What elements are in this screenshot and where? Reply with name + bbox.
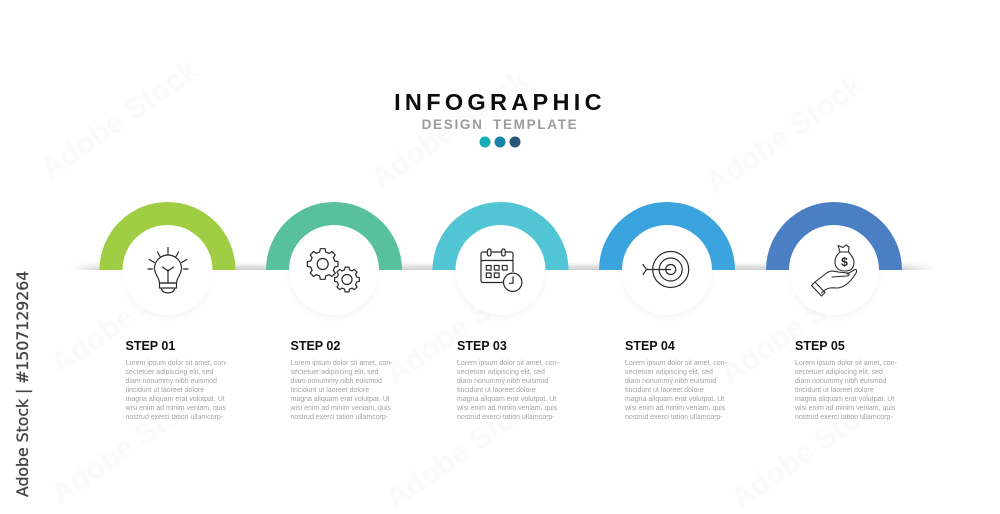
title dots [480, 136, 520, 148]
icon: hand with money bag [812, 245, 857, 296]
step 3 text: sectetuer adipiscing elit, sed [457, 369, 545, 376]
arc 5 [766, 202, 902, 317]
arc 4 [599, 202, 735, 317]
step 2 text: STEP 02 [290, 339, 340, 353]
step 5 text: STEP 05 [795, 339, 845, 353]
step 4 text: nostrud exerci tation ullamcorp- [625, 414, 723, 421]
step 5 text: tincidunt ut laoreet dolore [795, 387, 874, 394]
background and diagram: Adobe Stock [35, 53, 204, 186]
step 2 text: nostrud exerci tation ullamcorp- [290, 414, 388, 421]
background and diagram: Adobe Stock [380, 383, 549, 514]
step 5 text: diam nonummy nibh euismod [795, 378, 886, 385]
step 5 text: nostrud exerci tation ullamcorp- [795, 414, 893, 421]
background and diagram: Adobe Stock [725, 383, 894, 514]
icon: calendar with clock [481, 249, 522, 291]
step 1 text: sectetuer adipiscing elit, sed [126, 369, 213, 376]
step 3 text: tincidunt ut laoreet dolore [457, 387, 536, 394]
step 5 text: Lorem ipsum dolor sit amet, con- [795, 360, 897, 367]
background and diagram: Adobe Stock [45, 378, 214, 511]
step 5 text: sectetuer adipiscing elit, sed [795, 369, 883, 376]
step 4 text [625, 339, 727, 421]
step 2 text: magna aliquam erat volutpat. Ut [290, 396, 390, 403]
step 5 text: wisi enim ad minim veniam, quis [795, 405, 895, 412]
step 2 text [290, 339, 392, 421]
background and diagram: Adobe Stock [45, 248, 214, 381]
step 1 text: tincidunt ut laoreet dolore [126, 387, 204, 394]
step 4 text: tincidunt ut laoreet dolore [625, 387, 704, 394]
step 1 text: Lorem ipsum dolor sit amet, con- [126, 360, 227, 367]
step 4 text: sectetuer adipiscing elit, sed [625, 369, 713, 376]
step 2 text: Lorem ipsum dolor sit amet, con- [290, 360, 392, 367]
background and diagram: Adobe Stock [715, 258, 884, 391]
step 1 text: STEP 01 [126, 339, 175, 353]
step 3 text: diam nonummy nibh euismod [457, 378, 548, 385]
step 2 text: sectetuer adipiscing elit, sed [290, 369, 378, 376]
title: INFOGRAPHIC [394, 89, 606, 115]
subtitle: DESIGN TEMPLATE [422, 117, 578, 132]
step 1 text: nostrud exerci tation ullamcorp- [126, 414, 223, 421]
step 2 text: diam nonummy nibh euismod [290, 378, 382, 385]
step 4 text: wisi enim ad minim veniam, quis [625, 405, 725, 412]
background and diagram [76, 136, 929, 318]
step 2 text: tincidunt ut laoreet dolore [290, 387, 369, 394]
arc 3 [432, 202, 568, 317]
step 4 text: STEP 04 [625, 339, 675, 353]
background and diagram: Adobe Stock [365, 63, 534, 196]
stock watermark id: Adobe Stock | #1507129264 [13, 271, 32, 497]
step 3 text: magna aliquam erat volutpat. Ut [457, 396, 556, 403]
step 1 text: magna aliquam erat volutpat. Ut [126, 396, 225, 403]
step 4 text: diam nonummy nibh euismod [625, 378, 716, 385]
step 2 text: wisi enim ad minim veniam, quis [290, 405, 391, 412]
step 3 text: STEP 03 [457, 339, 507, 353]
step 4 text: Lorem ipsum dolor sit amet, con- [625, 360, 727, 367]
step 3 text: nostrud exerci tation ullamcorp- [457, 414, 555, 421]
baseline shadow [76, 264, 929, 270]
step 1 text: diam nonummy nibh euismod [126, 378, 217, 385]
step 1 text [126, 339, 228, 421]
step 5 text [795, 339, 897, 421]
icon: gears [307, 249, 359, 292]
step 1 text: wisi enim ad minim veniam, quis [126, 405, 226, 412]
icon: target with arrow [643, 252, 689, 288]
step 3 text [457, 339, 559, 421]
icon: dollar sign: $ [841, 254, 848, 268]
icon: light bulb [148, 248, 188, 293]
background and diagram: Adobe Stock [380, 258, 549, 391]
background and diagram: Adobe Stock [700, 68, 869, 201]
step 3 text: wisi enim ad minim veniam, quis [457, 405, 557, 412]
step 5 text: magna aliquam erat volutpat. Ut [795, 396, 894, 403]
arc 2 [266, 202, 402, 317]
step 4 text: magna aliquam erat volutpat. Ut [625, 396, 724, 403]
step 3 text: Lorem ipsum dolor sit amet, con- [457, 360, 559, 367]
arc 1 [100, 202, 236, 317]
